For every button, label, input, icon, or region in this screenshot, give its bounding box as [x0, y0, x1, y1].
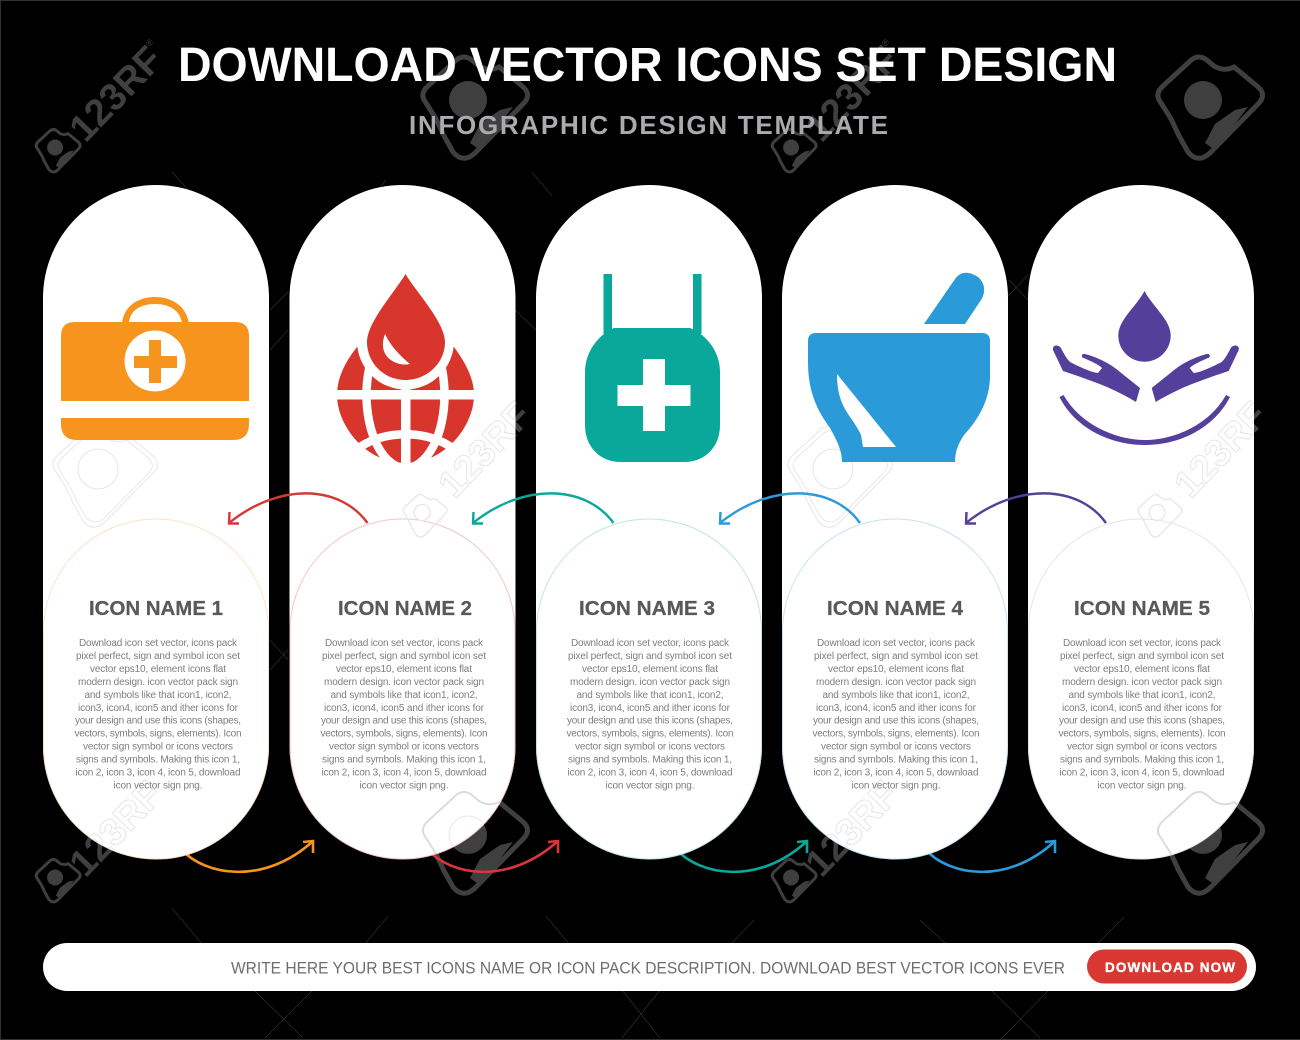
- description 1: pixel perfect, sign and symbol icon set: [76, 651, 240, 662]
- upper arrow: red: [229, 493, 368, 524]
- description 4: vector eps10, element icons flat: [828, 664, 964, 675]
- description 4: your design and use this icons (shapes,: [813, 716, 979, 726]
- description 2: icon vector sign png.: [360, 780, 448, 792]
- panel 1 pill: [43, 185, 269, 859]
- description 4: icon 2, icon 3, icon 4, icon 5, download: [814, 768, 978, 778]
- panel 4 inner outline: [782, 519, 1008, 859]
- watermarks on white panels: 123RF: [431, 395, 540, 506]
- upper arrow: purple: [966, 493, 1106, 524]
- description 1: icon3, icon4, icon5 and ither icons for: [78, 703, 239, 714]
- description 2: vectors, symbols, signs, elements). Icon: [320, 728, 488, 740]
- description 1: [74, 638, 242, 792]
- description 5: icon 2, icon 3, icon 4, icon 5, download: [1060, 768, 1224, 778]
- icon: blood drop over globe: [330, 274, 480, 468]
- lower arrow: teal: [675, 841, 807, 872]
- description 1: vectors, symbols, signs, elements). Icon: [74, 728, 242, 740]
- lower arrow: red: [426, 841, 558, 872]
- description 5: icon vector sign png.: [1098, 780, 1186, 792]
- description 3: [566, 638, 734, 792]
- watermarks on white panels: 123RF: [798, 774, 907, 885]
- description 4: icon vector sign png.: [852, 780, 940, 792]
- description 2: pixel perfect, sign and symbol icon set: [322, 651, 486, 662]
- description 5: pixel perfect, sign and symbol icon set: [1060, 651, 1224, 662]
- description 3: vector eps10, element icons flat: [582, 664, 718, 675]
- description 4: icon3, icon4, icon5 and ither icons for: [816, 703, 977, 714]
- watermarks on black: [36, 38, 1276, 902]
- watermarks on black: 123RF: [431, 395, 540, 506]
- description 4: signs and symbols. Making this icon 1,: [814, 754, 978, 766]
- description 5: vectors, symbols, signs, elements). Icon: [1058, 728, 1226, 740]
- panel 5 pill: [1028, 185, 1254, 859]
- icon: medical briefcase: [61, 297, 249, 440]
- description 4: and symbols like that icon1, icon2,: [822, 690, 970, 701]
- description 3: icon 2, icon 3, icon 4, icon 5, download: [568, 768, 732, 778]
- thin crossing lines: [172, 172, 1124, 1038]
- description 1: and symbols like that icon1, icon2,: [84, 690, 232, 701]
- watermarks on white panels: 123RF: [1167, 395, 1276, 506]
- panel 4 pill: [782, 185, 1008, 859]
- description 2: vector eps10, element icons flat: [336, 664, 472, 675]
- description 3: pixel perfect, sign and symbol icon set: [568, 651, 732, 662]
- description 5: signs and symbols. Making this icon 1,: [1060, 754, 1224, 766]
- upper arrow: teal: [473, 493, 614, 524]
- watermarks on black: 123RF: [62, 774, 171, 885]
- description 4: pixel perfect, sign and symbol icon set: [814, 651, 978, 662]
- description 3: vector sign symbol or icons vectors: [575, 742, 725, 752]
- description 4: vector sign symbol or icons vectors: [821, 742, 971, 752]
- watermarks on black: ®: [882, 38, 889, 48]
- description 2: and symbols like that icon1, icon2,: [330, 690, 478, 701]
- description 2: vector sign symbol or icons vectors: [329, 742, 479, 752]
- description 1: icon 2, icon 3, icon 4, icon 5, download: [76, 768, 240, 778]
- description 4: modern design. icon vector pack sign: [816, 677, 976, 688]
- lower arrow: orange: [180, 841, 313, 872]
- description 1: icon vector sign png.: [114, 780, 202, 792]
- watermarks on white panels: [52, 400, 1254, 855]
- description 2: your design and use this icons (shapes,: [321, 716, 487, 726]
- footer text: WRITE HERE YOUR BEST ICONS NAME OR ICON PACK DESCRIPTION. DOWNLOAD BEST VECTOR ICONS EVER: [231, 960, 1065, 978]
- description 5: Download icon set vector, icons pack: [1063, 638, 1222, 649]
- panel 5 inner outline: [1028, 519, 1254, 859]
- description 1: your design and use this icons (shapes,: [75, 716, 241, 726]
- title: DOWNLOAD VECTOR ICONS SET DESIGN: [178, 39, 1117, 92]
- icon: drop and caring hands: [1053, 291, 1239, 445]
- upper arrow: blue: [720, 493, 860, 524]
- name 4: ICON NAME 4: [827, 597, 964, 620]
- description 5: [1058, 638, 1226, 792]
- watermarks on white panels: 123RF: [62, 774, 171, 885]
- description 5: your design and use this icons (shapes,: [1059, 716, 1225, 726]
- description 1: modern design. icon vector pack sign: [78, 677, 238, 688]
- description 1: signs and symbols. Making this icon 1,: [76, 754, 240, 766]
- description 3: modern design. icon vector pack sign: [570, 677, 730, 688]
- description 1: vector eps10, element icons flat: [90, 664, 226, 675]
- name 2: ICON NAME 2: [338, 597, 472, 620]
- description 5: vector eps10, element icons flat: [1074, 664, 1210, 675]
- subtitle: INFOGRAPHIC DESIGN TEMPLATE: [409, 110, 888, 140]
- panel 1 inner outline: [44, 519, 268, 859]
- description 2: Download icon set vector, icons pack: [325, 638, 484, 649]
- description 3: Download icon set vector, icons pack: [571, 638, 730, 649]
- panel 3 pill: [536, 185, 762, 859]
- description 1: vector sign symbol or icons vectors: [83, 742, 233, 752]
- watermarks on black: 123RF: [798, 39, 907, 150]
- description 2: [320, 638, 488, 792]
- description 3: vectors, symbols, signs, elements). Icon: [566, 728, 734, 740]
- name 1: ICON NAME 1: [89, 597, 223, 620]
- description 5: modern design. icon vector pack sign: [1062, 677, 1222, 688]
- download button: DOWNLOAD NOW: [1105, 960, 1235, 975]
- watermarks on black: 123RF: [1167, 395, 1276, 506]
- description 2: icon3, icon4, icon5 and ither icons for: [324, 703, 485, 714]
- watermarks on black: 123RF: [798, 774, 907, 885]
- description 2: icon 2, icon 3, icon 4, icon 5, download: [322, 768, 486, 778]
- description 3: icon vector sign png.: [606, 780, 694, 792]
- description 3: signs and symbols. Making this icon 1,: [568, 754, 732, 766]
- watermarks on black: 123RF: [62, 39, 171, 150]
- description 4: vectors, symbols, signs, elements). Icon: [812, 728, 980, 740]
- description 2: modern design. icon vector pack sign: [324, 677, 484, 688]
- description 5: and symbols like that icon1, icon2,: [1068, 690, 1216, 701]
- lower arrow: blue: [924, 841, 1055, 872]
- description 3: icon3, icon4, icon5 and ither icons for: [570, 703, 731, 714]
- name 3: ICON NAME 3: [579, 597, 715, 620]
- description 5: vector sign symbol or icons vectors: [1067, 742, 1217, 752]
- watermarks on black: ®: [146, 38, 153, 48]
- panel 3 inner outline: [536, 519, 762, 859]
- icon: mortar and pestle: [808, 273, 990, 462]
- footer bar: [43, 943, 1256, 991]
- name 5: ICON NAME 5: [1074, 597, 1210, 620]
- description 3: and symbols like that icon1, icon2,: [576, 690, 724, 701]
- description 3: your design and use this icons (shapes,: [567, 716, 733, 726]
- description 1: Download icon set vector, icons pack: [79, 638, 238, 649]
- panel 2 pill: [290, 185, 516, 859]
- description 4: Download icon set vector, icons pack: [817, 638, 976, 649]
- icon: teal medical bag: [585, 274, 720, 462]
- description 2: signs and symbols. Making this icon 1,: [322, 754, 486, 766]
- description 4: [812, 638, 980, 792]
- description 5: icon3, icon4, icon5 and ither icons for: [1062, 703, 1223, 714]
- download button: [1087, 950, 1247, 984]
- panel 2 inner outline: [290, 519, 515, 859]
